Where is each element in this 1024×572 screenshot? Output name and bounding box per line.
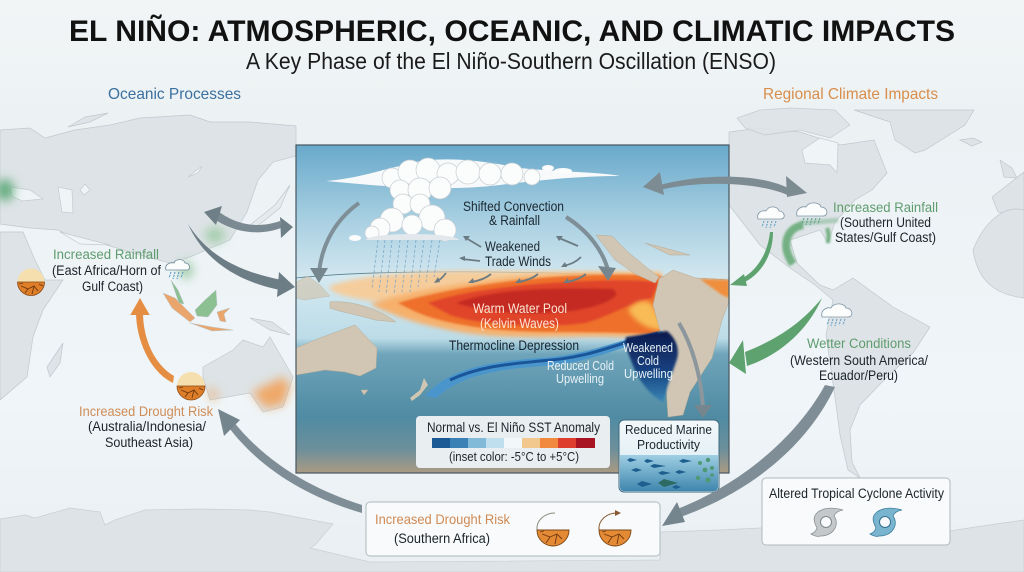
- arrow: upper-level double arrow: [643, 172, 807, 197]
- label: shifted convection: [464, 201, 564, 225]
- label: wetter conditions: Wetter Conditions: [807, 336, 911, 351]
- label: reduced cold upwelling: Reduced Cold: [547, 359, 614, 373]
- label: drought Australia: Southeast Asia): [105, 435, 193, 450]
- icon: cyclone blue: [870, 508, 902, 536]
- Antarctica: [0, 508, 1024, 572]
- label: weakened cold upwelling: Upwelling: [624, 367, 673, 381]
- legend: SST anomaly: (inset color: -5°C to +5°C): [449, 449, 579, 464]
- subtitle: A Key Phase of the El Niño-Southern Oscillation (ENSO): [246, 48, 776, 74]
- label: weakened cold upwelling: Weakened: [623, 341, 673, 355]
- panel: reduced marine productivity: [619, 420, 719, 492]
- arrow: west Pacific double arrow: [204, 206, 293, 238]
- icon: rain cloud Mexico: [758, 207, 784, 228]
- label: rainfall southern US: Increased Rainfall: [833, 200, 938, 215]
- label: thermocline depression: Thermocline Depression: [449, 338, 579, 353]
- Eurasia: [0, 115, 296, 263]
- icon: cracked earth 2: [599, 510, 631, 546]
- label: weakened cold upwelling: Cold: [637, 354, 659, 368]
- label: rainfall East Africa: [52, 247, 161, 294]
- icon: rain cloud Ecuador: [822, 304, 852, 326]
- panel: altered tropical cyclone activity: [762, 478, 950, 545]
- label: wetter conditions: Ecuador/Peru): [819, 368, 898, 383]
- panel: reduced marine productivity: Reduced Marine: [625, 422, 712, 437]
- arrow: green to Pacific from US: [730, 232, 773, 286]
- label: reduced cold upwelling: Upwelling: [556, 372, 604, 386]
- heading: oceanic processes: Oceanic Processes: [108, 86, 241, 103]
- icon: drought badge Australia: [177, 372, 205, 400]
- label: weakened trade winds: [485, 241, 551, 266]
- arrow: green to Pacific from South America: [729, 298, 822, 374]
- label: drought Australia: [79, 403, 214, 450]
- Southeast Asia islands: [163, 280, 233, 331]
- panel: altered tropical cyclone activity: Altered Tropical Cyclone Activity: [769, 486, 944, 501]
- Arctic islands: [737, 108, 850, 138]
- title: EL NIÑO: ATMOSPHERIC, OCEANIC, AND CLIMATIC IMPACTS: [69, 14, 955, 48]
- label: rainfall southern US: (Southern United: [840, 215, 931, 230]
- icon: rain cloud Gulf: [797, 203, 827, 225]
- heading: regional climate impacts: Regional Climate Impacts: [763, 86, 938, 103]
- Europe right: [992, 172, 1024, 217]
- thundercloud: [326, 158, 620, 241]
- label: rainfall East Africa: Gulf Coast): [82, 279, 143, 294]
- warm water pool: [328, 271, 680, 338]
- label: wetter conditions: (Western South America/: [790, 353, 928, 368]
- label: rainfall East Africa: Increased Rainfall: [53, 247, 159, 262]
- legend: SST anomaly: [416, 416, 610, 468]
- label: shifted convection: Shifted Convection: [463, 199, 564, 214]
- panel frame: [296, 145, 729, 473]
- UK: [1000, 160, 1017, 178]
- label: drought Australia: (Australia/Indonesia/: [88, 419, 206, 434]
- regional tints on the world map: [0, 179, 290, 408]
- thermocline stripe: [425, 331, 664, 398]
- Australia: [203, 337, 293, 412]
- South America: [653, 270, 729, 417]
- arrow: orange drought to rainfall: [132, 300, 174, 383]
- icon: cyclone gray: [811, 508, 843, 536]
- large circulation arrows: [319, 203, 703, 408]
- cold upwelling plume: [625, 331, 678, 402]
- label: reduced cold upwelling: [547, 359, 614, 386]
- arrow: gray to southern Africa: [662, 385, 835, 526]
- label: drought Australia: Increased Drought Risk: [79, 403, 214, 419]
- weakened trade wind arrows: [437, 238, 586, 282]
- label: warm water pool: (Kelvin Waves): [480, 316, 559, 331]
- icon: drought badge Africa: [18, 268, 44, 296]
- panel: drought southern Africa: (Southern Africa): [394, 531, 490, 546]
- label: weakened trade winds: Trade Winds: [485, 254, 551, 269]
- arrow: Indo-Pacific sweep: [188, 224, 295, 297]
- label: rainfall East Africa: (East Africa/Horn of: [52, 263, 161, 278]
- Africa left: [0, 232, 63, 400]
- icon: fish school: [627, 458, 692, 489]
- Greenland: [854, 110, 974, 153]
- panel: Pacific cross-section: [296, 145, 729, 473]
- icon: plankton: [696, 458, 714, 483]
- label: warm water pool: Warm Water Pool: [473, 301, 567, 316]
- land masses in panel: [296, 235, 729, 417]
- label: wetter conditions: [790, 336, 928, 383]
- New Guinea left: [250, 318, 290, 335]
- icon: cracked earth 1: [537, 513, 569, 546]
- label: shifted convection: & Rainfall: [489, 213, 540, 228]
- rain shaft: [372, 240, 440, 294]
- legend: SST anomaly: Normal vs. El Niño SST Anomaly: [427, 420, 600, 435]
- arrow: bottom-left gray to Australia: [218, 409, 362, 513]
- icon: rain cloud east Asia: [166, 260, 189, 279]
- tint: Gulf Coast rainfall: [786, 220, 838, 264]
- North America: [729, 128, 930, 478]
- label: rainfall southern US: States/Gulf Coast): [835, 230, 936, 245]
- label: weakened trade winds: Weakened: [485, 239, 540, 254]
- label: warm water pool: [473, 301, 567, 331]
- Africa right: [973, 209, 1024, 298]
- label: rainfall southern US: [833, 200, 938, 245]
- panel: drought southern Africa: Increased Drought Risk: [375, 511, 511, 527]
- panel: reduced marine productivity: Productivity: [637, 437, 700, 452]
- New Zealand: [410, 378, 428, 401]
- label: weakened cold upwelling: [623, 341, 673, 381]
- panel: drought southern Africa: [366, 502, 660, 556]
